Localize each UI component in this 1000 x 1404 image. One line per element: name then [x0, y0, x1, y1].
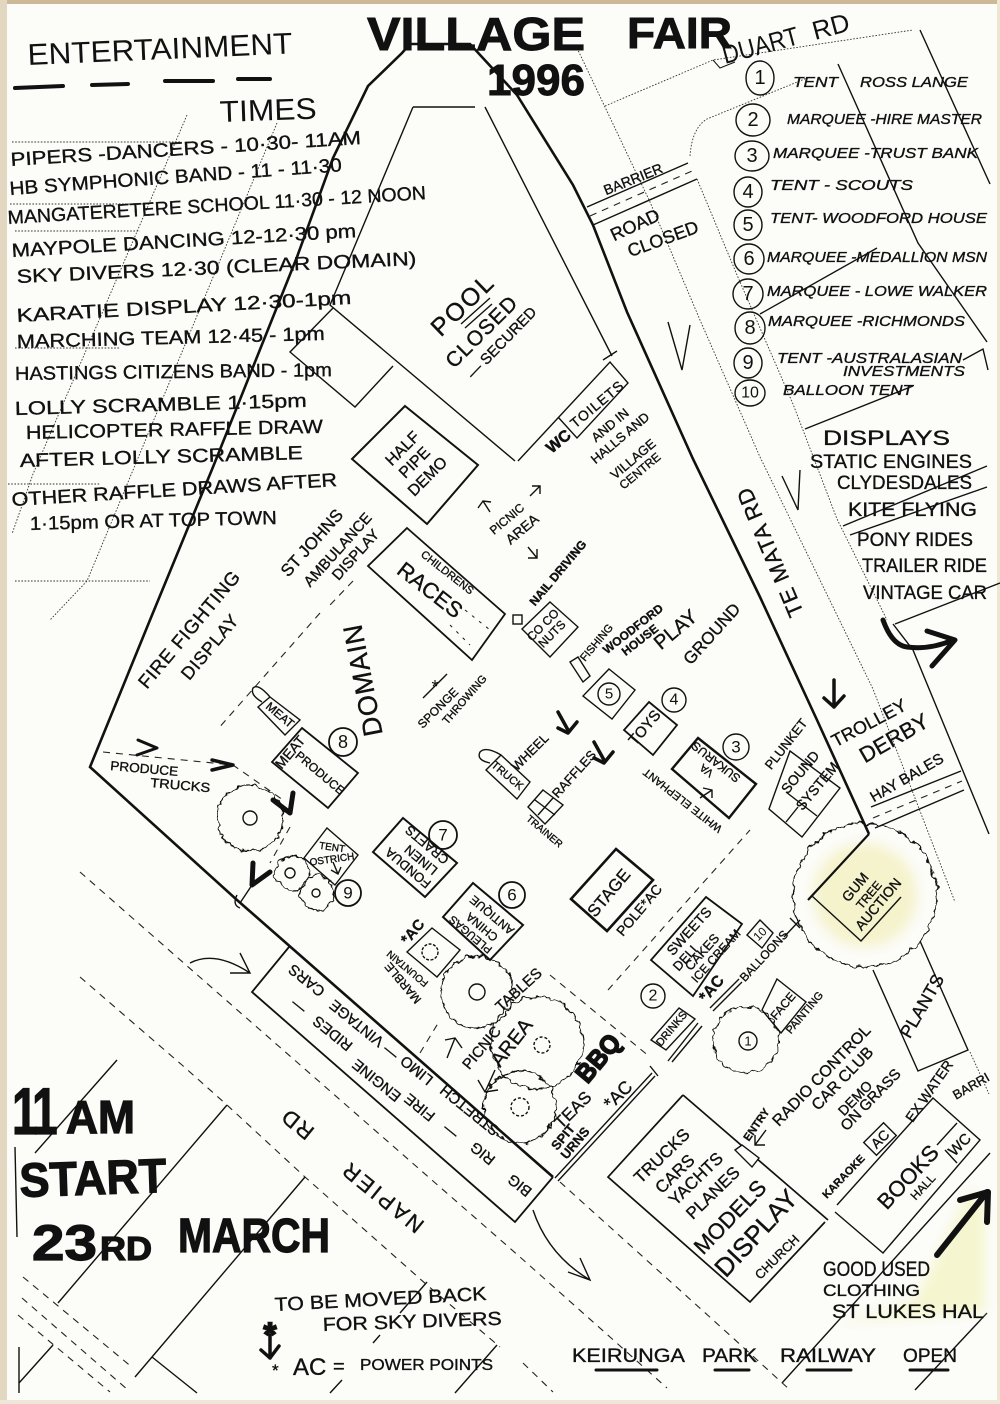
schedule list — [7, 128, 427, 535]
keirunga park railway note: OPEN — [903, 1346, 957, 1367]
nail driving and coconuts — [513, 537, 589, 657]
fondua linen crafts 7: LINEN — [402, 842, 440, 878]
big rig vintage car strip: CARS — [285, 960, 329, 1000]
sweets deli cakes ice cream 2: DELI — [670, 942, 700, 974]
dashed fence line — [608, 830, 750, 990]
models display church: MODELS — [689, 1175, 771, 1259]
schedule list: AFTER LOLLY SCRAMBLE — [20, 443, 303, 472]
toys tent 4: TOYS — [625, 707, 665, 749]
keirunga park railway note: PARK — [702, 1346, 757, 1367]
traffic arrows on Te Mata Rd — [668, 322, 844, 707]
street label: Duart Rd: RD — [809, 7, 853, 46]
bbq and spit teas: *AC — [600, 1077, 636, 1113]
tent names: TENT -AUSTRALASIAN — [777, 350, 962, 367]
toilets: WC — [543, 427, 575, 457]
tent names — [767, 74, 988, 399]
power points legend — [272, 1354, 493, 1381]
models display church: YACHTS — [665, 1149, 727, 1209]
meat and produce marquee 8: PRODUCE — [293, 748, 347, 798]
produce trucks: PRODUCE — [110, 758, 179, 779]
fondua linen crafts 7: 7 — [438, 826, 448, 844]
plunket sound system — [762, 716, 842, 837]
toilets: VILLAGE — [607, 436, 659, 482]
road closed barrier: CLOSED — [625, 217, 701, 261]
models display church: TRUCKS — [630, 1125, 694, 1187]
tent names: MARQUEE - LOWE WALKER — [767, 283, 987, 300]
st johns ambulance display: AMBULANCE — [300, 510, 376, 590]
schedule list: LOLLY SCRAMBLE 1·15pm — [15, 391, 307, 420]
meat and produce marquee 8: 8 — [338, 732, 348, 752]
tent names: ROSS LANGE — [860, 74, 969, 91]
produce trucks: TRUCKS — [150, 775, 211, 795]
trolley derby — [828, 695, 964, 828]
toilets: AND IN — [588, 405, 632, 445]
truck wheel raffles — [479, 730, 599, 850]
big rig vintage car strip: ENGINE — [349, 1055, 405, 1105]
sweets deli cakes ice cream 2: 10 — [750, 924, 770, 944]
truck wheel raffles: TRAINER — [524, 814, 564, 850]
bbq and spit teas: SPIT — [548, 1121, 578, 1153]
title: VILLAGE — [367, 8, 585, 60]
meat and produce marquee 8 — [272, 728, 358, 808]
schedule list: KARATIE DISPLAY 12·30-1pm — [16, 288, 352, 327]
picnic tables area with trees — [420, 956, 650, 1143]
panel: displays list: DISPLAYS — [823, 427, 950, 450]
balloons — [710, 918, 800, 1011]
st johns ambulance display: ST JOHNS — [277, 506, 347, 580]
plunket sound system: SYSTEM — [792, 759, 842, 813]
tent 1 tree — [713, 1007, 779, 1073]
meat and produce marquee 8: MEAT — [272, 732, 309, 772]
road label: Napier Rd: NAPIER — [335, 1156, 429, 1238]
circle numbers: 4 — [742, 181, 754, 203]
gum tree auction: GUM — [838, 869, 872, 905]
drinks: DRINKS — [654, 1009, 690, 1049]
sky divers note: TO BE MOVED BACK — [274, 1284, 487, 1316]
schedule list: PIPERS -DANCERS - 10·30- 11AM — [10, 128, 362, 171]
power points legend: AC — [293, 1354, 326, 1381]
panel: numbered tent list — [733, 61, 988, 406]
sky divers note: FOR SKY DIVERS — [322, 1309, 502, 1336]
toys tent 4 — [624, 688, 686, 755]
radio control car club: RADIO CONTROL — [770, 1022, 874, 1130]
heading: times: TIMES — [219, 93, 317, 129]
start time and date — [12, 1075, 330, 1271]
circle numbers: 6 — [743, 248, 755, 270]
road closed barrier: ROAD — [607, 205, 663, 245]
picnic area label: PICNIC — [487, 500, 527, 537]
panel: displays list: TRAILER RIDE — [862, 556, 987, 577]
picnic tables area with trees: TABLES — [492, 965, 546, 1015]
pleuras china antique 6: PLEUGAS — [447, 913, 495, 955]
marble fountain — [382, 916, 460, 1006]
pool: CLOSED — [441, 291, 523, 373]
tent names: TENT — [793, 74, 840, 91]
play ground label: GROUND — [680, 600, 744, 668]
models display church: ENTRY — [742, 1106, 773, 1144]
fishing stall — [570, 622, 616, 682]
bbq and spit teas: TEAS — [551, 1088, 595, 1132]
models display church — [608, 1095, 828, 1302]
face painting: FACE — [768, 989, 798, 1023]
books hall wc: WC — [945, 1130, 975, 1160]
pleuras china antique 6: 6 — [507, 886, 517, 904]
arrow: to clothing hall — [937, 1192, 988, 1255]
tent names: TENT- WOODFORD HOUSE — [770, 210, 988, 227]
sponge throwing: THROWING — [440, 673, 490, 727]
truck wheel raffles: RAFFLES — [549, 747, 599, 801]
schedule list: HB SYMPHONIC BAND - 11 - 11·30 — [9, 155, 343, 200]
schedule list: OTHER RAFFLE DRAWS AFTER — [11, 470, 338, 511]
picnic area label: AREA — [502, 510, 542, 547]
tent ostrich 9: OSTRICH — [309, 851, 355, 869]
thick arrows at market entrance — [252, 793, 293, 885]
street label: Duart Rd: DUART — [719, 21, 802, 70]
circle numbers: 2 — [747, 109, 759, 131]
woodford house tent 5: 5 — [605, 686, 613, 702]
truck wheel raffles: WHEEL — [508, 730, 552, 774]
title: FAIR — [627, 9, 732, 58]
big rig vintage car strip: STRETCH — [437, 1081, 503, 1139]
white elephant marquee 3: SUKARUS — [689, 739, 743, 785]
karaoke, AC, water and barrier labels: EX WATER — [902, 1057, 956, 1125]
street label: Duart Rd — [712, 15, 848, 69]
meat stall — [252, 687, 300, 735]
plants — [873, 941, 968, 1071]
title — [367, 8, 732, 105]
circle numbers: 7 — [742, 283, 754, 305]
circle numbers: 5 — [742, 214, 754, 236]
toilets: TOILETS — [567, 377, 627, 431]
toilets: CENTRE — [617, 450, 663, 492]
gum tree auction: AUCTION — [852, 875, 904, 933]
half pipe demo: PIPE — [396, 444, 434, 482]
sweets deli cakes ice cream 2: SWEETS — [663, 904, 715, 958]
panel: displays list: CLYDESDALES — [837, 473, 972, 494]
schedule list: HELICOPTER RAFFLE DRAW — [26, 417, 323, 444]
start time and date: 23 — [32, 1215, 97, 1271]
big rig vintage car strip: — — [379, 1042, 401, 1064]
stage — [571, 849, 665, 939]
nail driving and coconuts: CO CO — [524, 606, 562, 644]
keirunga park railway note: RAILWAY — [780, 1346, 876, 1367]
power points legend: POWER POINTS — [360, 1357, 493, 1374]
pleuras china antique 6 — [443, 882, 525, 960]
plants: PLANTS — [896, 971, 948, 1041]
white elephant marquee 3: WHITE ELEPHANT — [641, 765, 725, 834]
karaoke, AC, water and barrier labels: KARAOKE — [820, 1153, 868, 1201]
pleuras china antique 6: ANTIQUE — [467, 892, 517, 938]
bbq and spit teas: URNS — [557, 1124, 593, 1162]
power points legend: * — [272, 1361, 279, 1380]
balloons: BALLOONS — [737, 928, 791, 984]
stage: STAGE — [584, 865, 634, 921]
stage: POLE*AC — [613, 881, 665, 939]
big rig vintage car strip: RIG — [467, 1138, 499, 1168]
radio control car club: DEMO — [835, 1077, 875, 1119]
meat stall: MEAT — [263, 699, 297, 731]
fondua linen crafts 7: FONDUA — [382, 844, 434, 891]
marble fountain: MARBLE — [382, 960, 424, 1006]
half pipe demo — [352, 406, 478, 524]
sweets deli cakes ice cream 2 — [641, 897, 773, 1008]
karaoke, AC, water and barrier labels: AC — [867, 1126, 893, 1152]
marble fountain: *AC — [398, 916, 428, 948]
arrows along Napier Rd — [190, 953, 590, 1280]
plunket sound system: PLUNKET — [762, 716, 810, 772]
tent names: BALLOON TENT — [783, 382, 915, 399]
start time and date: 1 — [32, 1075, 58, 1149]
panel: displays list: KITE FLYING — [848, 500, 977, 521]
sweets deli cakes ice cream 2: *AC — [696, 972, 728, 1006]
sweets deli cakes ice cream 2: ICE CREAM — [688, 927, 744, 985]
icon: star and arrow: * — [263, 1316, 277, 1354]
white elephant marquee 3: 3 — [731, 738, 741, 756]
circle numbers: 10 — [741, 384, 759, 402]
fire fighting display: DISPLAY — [177, 610, 243, 684]
gum tree auction — [793, 823, 937, 967]
number circles — [733, 61, 774, 406]
sweets deli cakes ice cream 2: CAKES — [682, 930, 723, 973]
truck wheel raffles: TRUCK — [489, 759, 526, 793]
models display church: CHURCH — [752, 1232, 802, 1282]
produce trucks — [103, 740, 290, 863]
toilets — [518, 351, 663, 492]
nail driving and coconuts: NUTS — [535, 617, 569, 651]
face painting: PAINTING — [784, 990, 826, 1036]
small trees — [235, 856, 334, 910]
marble fountain: FOUNTAIN — [385, 948, 431, 988]
site boundary — [90, 44, 869, 1177]
yellow highlight: gum tree — [813, 843, 917, 947]
circle numbers: 1 — [754, 67, 766, 89]
road label: Napier Rd — [275, 1103, 429, 1238]
half pipe demo: DEMO — [405, 454, 451, 500]
keirunga park railway note — [572, 1346, 957, 1370]
sponge throwing: * — [431, 677, 439, 697]
fishing stall: FISHING — [578, 622, 616, 664]
good used clothing note: ST LUKES HAL — [832, 1302, 984, 1323]
start time and date: START — [19, 1150, 167, 1208]
road closed barrier: BARRIER — [601, 160, 665, 198]
models display church: PLANES — [682, 1163, 744, 1223]
radio control car club: CAR CLUB — [809, 1044, 877, 1114]
books hall wc: BOOKS — [872, 1140, 944, 1214]
panel: entertainment times — [7, 27, 427, 535]
trolley derby: DERBY — [855, 708, 933, 768]
start time and date: MARCH — [178, 1210, 330, 1263]
big rig vintage car strip: FIRE — [401, 1090, 439, 1124]
arrow: displays direction — [883, 620, 955, 666]
good used clothing note: CLOTHING — [823, 1281, 920, 1300]
karaoke, AC, water and barrier labels — [820, 1057, 992, 1201]
panel: displays list: VINTAGE CAR — [863, 583, 987, 604]
tent ostrich 9: TENT — [318, 841, 346, 855]
fondua linen crafts 7 — [373, 818, 457, 897]
white elephant marquee 3 — [641, 734, 756, 834]
books hall wc — [835, 1098, 980, 1253]
picnic tables area with trees: PICNIC — [459, 1023, 505, 1073]
start time and date: AM — [66, 1091, 135, 1143]
schedule list: HASTINGS CITIZENS BAND - 1pm — [15, 360, 332, 385]
nail driving and coconuts: NAIL DRIVING — [527, 537, 589, 609]
star arrows — [558, 712, 613, 763]
big rig vintage car strip: VINTAGE — [326, 996, 388, 1050]
road label: Napier Rd: RD — [275, 1103, 319, 1145]
schedule list: 1·15pm OR AT TOP TOWN — [30, 508, 277, 535]
play ground label: PLAY — [650, 606, 702, 654]
st johns ambulance display: DISPLAY — [329, 526, 383, 584]
schedule list: MARCHING TEAM 12·45 - 1pm — [17, 324, 325, 353]
picnic area label — [478, 486, 542, 558]
drinks — [651, 1008, 702, 1062]
good used clothing note — [823, 1258, 984, 1323]
childrens races — [368, 528, 505, 660]
models display church: CARS — [651, 1151, 699, 1197]
pool — [290, 107, 612, 461]
big rig vintage car strip: — — [439, 1121, 461, 1143]
trolley derby: HAY BALES — [867, 750, 947, 806]
tent names: TENT - SCOUTS — [770, 177, 913, 194]
woodford house tent 5: WOODFORD — [600, 601, 666, 657]
pool: POOL — [425, 268, 501, 342]
bbq and spit teas — [548, 1028, 658, 1181]
plunket sound system: SOUND — [778, 747, 822, 797]
tent names: MARQUEE -MEDALLION MSN — [767, 249, 987, 266]
karaoke, AC, water and barrier labels: BARRI — [950, 1070, 992, 1102]
road: Te Mata right edge — [893, 624, 989, 834]
tree near produce trucks — [217, 785, 283, 851]
trolley derby: TROLLEY — [828, 695, 910, 751]
keirunga park railway note: KEIRUNGA — [572, 1346, 685, 1367]
circle numbers: 8 — [744, 317, 756, 339]
radio control car club: ON GRASS — [837, 1066, 905, 1134]
st johns ambulance display — [277, 506, 383, 590]
dashed path through domain — [217, 581, 353, 730]
tent names: MARQUEE -TRUST BANK — [773, 145, 979, 162]
circle numbers: 9 — [742, 352, 754, 374]
pool: — SECURED — [464, 304, 540, 382]
road label: Te Mata Rd: TE MATA RD — [731, 483, 809, 621]
gum tree auction: TREE — [853, 878, 885, 912]
play ground label — [650, 600, 744, 668]
good used clothing note: GOOD USED — [823, 1258, 930, 1281]
tent names: MARQUEE -HIRE MASTER — [787, 111, 982, 128]
power points legend: = — [333, 1356, 345, 1378]
schedule list: MAYPOLE DANCING 12-12·30 pm — [11, 221, 357, 262]
tent ostrich 9: 9 — [343, 884, 353, 902]
pleuras china antique 6: CHINA — [463, 910, 501, 944]
big rig vintage car strip: RIDES — [310, 1012, 356, 1054]
fondua linen crafts 7: CRAFTS — [402, 822, 452, 867]
heading: entertainment: ENTERTAINMENT — [27, 27, 293, 72]
tent names: MARQUEE -RICHMONDS — [768, 313, 965, 330]
panel: displays list: STATIC ENGINES — [810, 452, 972, 473]
sponge throwing: SPONGE — [415, 685, 461, 731]
title: 1996 — [487, 56, 585, 105]
schedule list: MANGATERETERE SCHOOL 11·30 - 12 NOON — [7, 183, 427, 229]
panel: displays list: PONY RIDES — [857, 530, 973, 551]
schedule list: SKY DIVERS 12·30 (CLEAR DOMAIN) — [16, 249, 417, 288]
fire fighting display: FIRE FIGHTING — [135, 567, 245, 693]
picnic tables area with trees: AREA — [487, 1014, 538, 1071]
tent 1 tree: 1 — [744, 1034, 752, 1048]
tent names: INVESTMENTS — [843, 363, 965, 380]
models display church: DISPLAY — [708, 1183, 804, 1283]
sky divers note — [274, 1284, 502, 1336]
sponge throwing — [415, 673, 490, 731]
tent ostrich 9 — [304, 828, 361, 906]
woodford house tent 5 — [583, 601, 666, 719]
half pipe demo: HALF — [383, 428, 424, 469]
childrens races: RACES — [392, 557, 468, 623]
heading underline dashes — [15, 79, 270, 88]
start time and date: RD — [100, 1230, 152, 1267]
icon: star and arrow — [261, 1316, 279, 1358]
circle numbers — [741, 67, 766, 402]
toilets: HALLS AND — [588, 409, 652, 467]
big rig vintage car strip: — — [287, 996, 309, 1018]
bbq and spit teas: BBQ — [569, 1028, 627, 1088]
domain label: DOMAIN — [337, 621, 389, 739]
road closed barrier — [587, 160, 701, 261]
yellow highlight: good used clothing — [835, 1190, 985, 1322]
panel: displays list — [810, 427, 987, 604]
toys tent 4: 4 — [670, 692, 679, 708]
start time and date: 1 — [12, 1075, 38, 1149]
big rig vintage car strip: LIMO — [397, 1052, 437, 1088]
white elephant marquee 3: VA — [697, 761, 716, 779]
big rig vintage car strip: BIG — [505, 1170, 535, 1200]
big rig vintage car strip — [252, 947, 553, 1222]
childrens races: CHILDRENS — [418, 549, 476, 597]
sweets deli cakes ice cream 2: 2 — [649, 988, 658, 1004]
face painting — [762, 979, 826, 1036]
circle numbers: 3 — [746, 145, 758, 167]
books hall wc: HALL — [908, 1171, 939, 1203]
woodford house tent 5: HOUSE — [619, 621, 661, 659]
